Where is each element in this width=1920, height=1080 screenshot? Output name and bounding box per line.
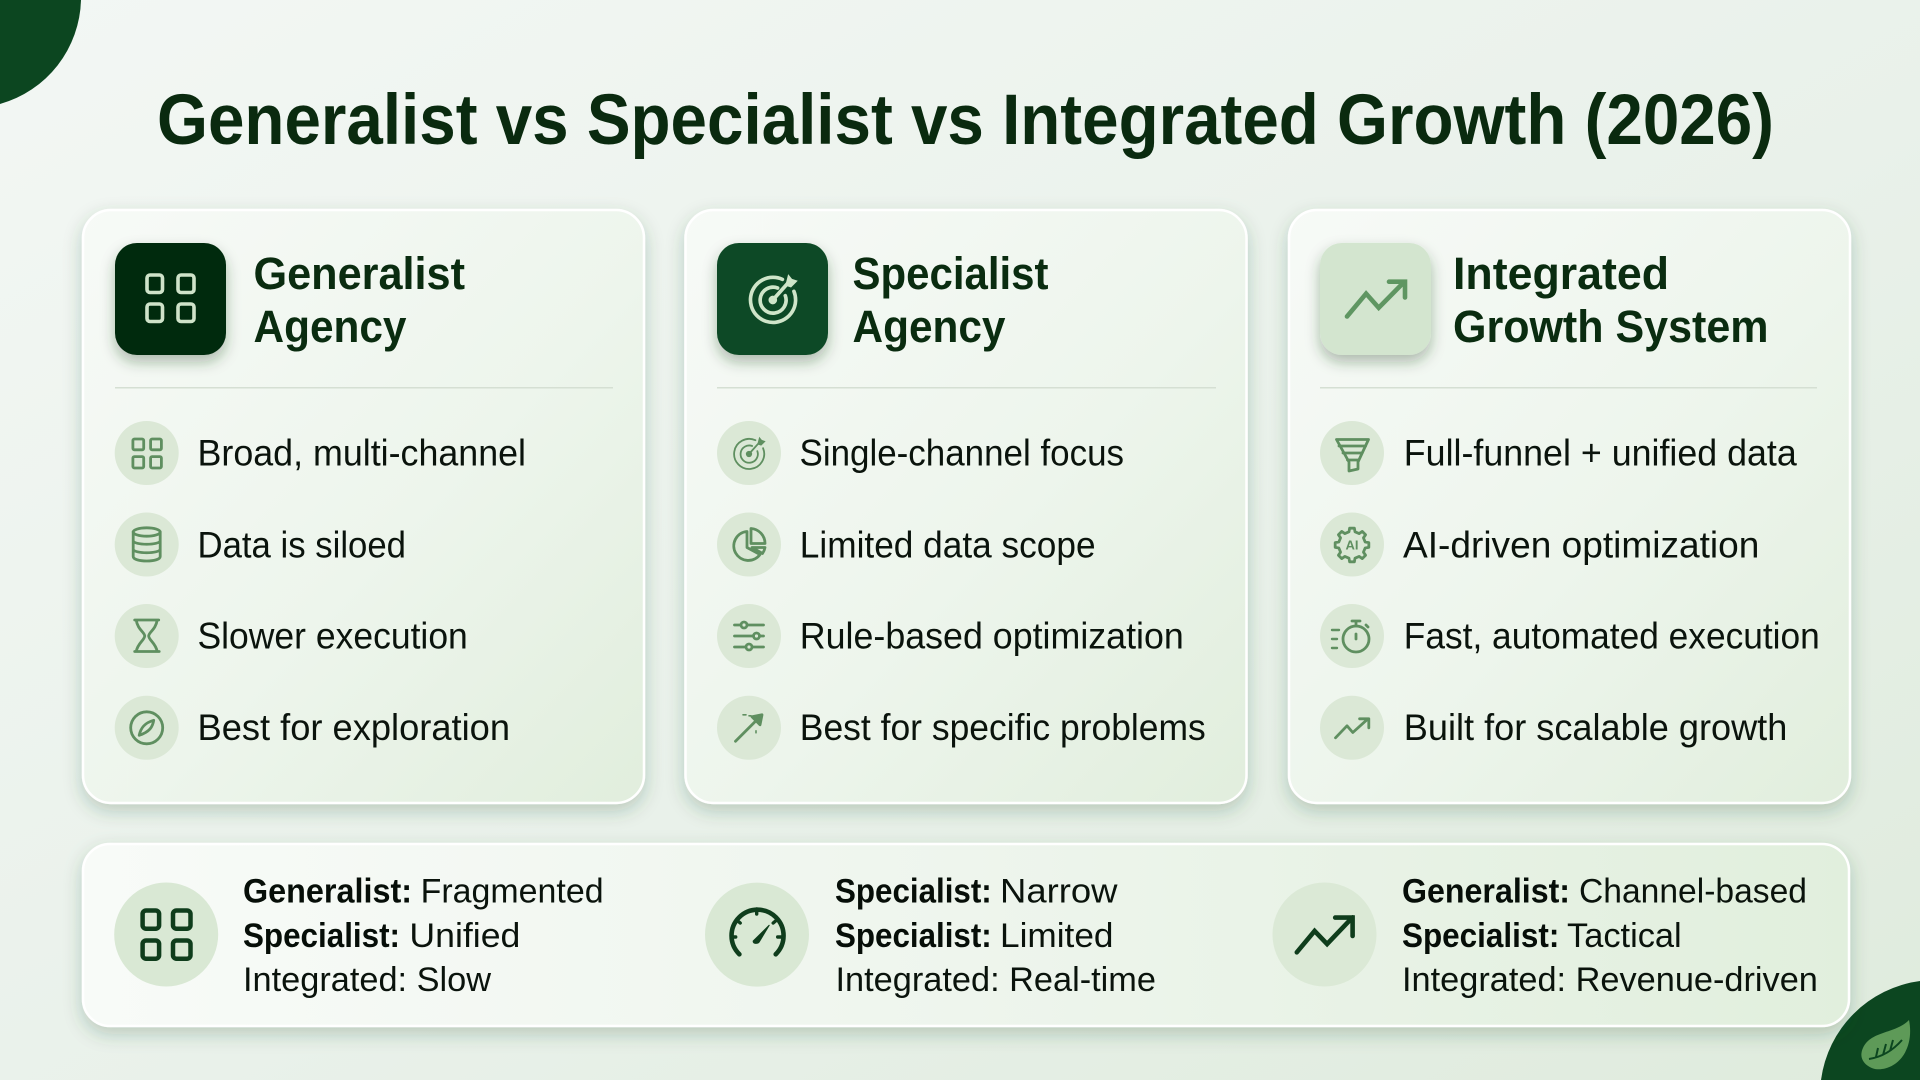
row: ai-driven optimization: AI-driven optimization bbox=[1403, 524, 1759, 566]
group: data comparison bbox=[114, 873, 604, 999]
heading: specialist agency: Agency bbox=[852, 301, 1006, 352]
row: rule-based optimization bbox=[717, 604, 1184, 668]
heading: integrated growth system: Integrated bbox=[1453, 248, 1669, 299]
title: Generalist vs Specialist vs Integrated Growth (2026) bbox=[157, 81, 1774, 160]
heading: integrated growth system bbox=[1453, 248, 1768, 352]
group: speed comparison bbox=[705, 873, 1156, 999]
icon: trend bbox=[1272, 882, 1376, 986]
row: limited data scope: Limited data scope bbox=[800, 524, 1096, 566]
row: ai-driven optimization: AI bbox=[1346, 538, 1358, 552]
row: limited data scope bbox=[717, 512, 1096, 576]
text: speed comparison lines bbox=[835, 873, 1156, 999]
row: fast automated execution: Fast, automated execution bbox=[1404, 616, 1820, 657]
icon: specialist header target bbox=[717, 243, 828, 355]
group: strategy comparison bbox=[1272, 873, 1818, 999]
text: data comparison lines: Integrated: Slow bbox=[243, 961, 491, 999]
text: strategy comparison lines: Tactical bbox=[1567, 917, 1682, 955]
text: data comparison lines: Specialist: bbox=[243, 917, 400, 955]
row: broad multi-channel bbox=[115, 421, 526, 485]
text: data comparison lines: Unified bbox=[409, 917, 520, 955]
text: strategy comparison lines bbox=[1402, 873, 1818, 999]
row: ai-driven optimization bbox=[1320, 512, 1759, 576]
heading: specialist agency bbox=[852, 248, 1049, 352]
text: data comparison lines: Fragmented bbox=[421, 873, 604, 911]
heading: specialist agency: Specialist bbox=[852, 248, 1049, 299]
row: best for exploration: Best for exploration bbox=[198, 707, 510, 748]
icon: grid bbox=[114, 882, 218, 986]
row: fast automated execution bbox=[1320, 604, 1820, 668]
panel: generalist agency bbox=[83, 210, 644, 803]
text: strategy comparison lines: Integrated: Revenue-driven bbox=[1402, 961, 1818, 999]
text: data comparison lines bbox=[243, 873, 604, 999]
text: speed comparison lines: Specialist: bbox=[835, 873, 992, 911]
panel: integrated growth system bbox=[1289, 210, 1850, 803]
row: best for specific problems bbox=[717, 696, 1206, 760]
row: slower execution bbox=[115, 604, 468, 668]
panel: specialist agency bbox=[686, 210, 1246, 803]
icon: integrated header trend bbox=[1320, 243, 1431, 355]
text: strategy comparison lines: Generalist: bbox=[1402, 873, 1570, 911]
row: data is siloed: Data is siloed bbox=[198, 524, 406, 566]
text: speed comparison lines: Integrated: Real-time bbox=[836, 961, 1156, 999]
text: speed comparison lines: Limited bbox=[1000, 917, 1114, 955]
row: best for specific problems: Best for specific problems bbox=[800, 707, 1206, 748]
row: full-funnel unified data: Full-funnel + unified data bbox=[1404, 433, 1797, 474]
icon: gauge bbox=[705, 883, 809, 987]
text: strategy comparison lines: Channel-based bbox=[1579, 873, 1807, 911]
heading: generalist agency: Generalist bbox=[254, 248, 465, 299]
text: data comparison lines: Generalist: bbox=[243, 873, 412, 911]
icon: generalist header grid bbox=[115, 243, 226, 355]
row: built for scalable growth: Built for scalable growth bbox=[1404, 707, 1787, 748]
heading: integrated growth system: Growth System bbox=[1453, 301, 1768, 352]
decorative corner: top left bbox=[0, 0, 81, 104]
row: best for exploration bbox=[115, 696, 510, 760]
text: speed comparison lines: Narrow bbox=[1000, 873, 1118, 911]
row: broad multi-channel: Broad, multi-channel bbox=[198, 433, 526, 474]
row: slower execution: Slower execution bbox=[198, 616, 468, 657]
decorative corner: bottom right with leaf bbox=[1821, 981, 1920, 1080]
text: speed comparison lines: Specialist: bbox=[835, 917, 992, 955]
row: single-channel focus bbox=[717, 421, 1124, 485]
heading: generalist agency bbox=[254, 248, 465, 352]
row: rule-based optimization: Rule-based optimization bbox=[800, 616, 1184, 657]
row: built for scalable growth bbox=[1320, 696, 1787, 760]
heading: generalist agency: Agency bbox=[254, 301, 406, 352]
row: single-channel focus: Single-channel focus bbox=[800, 433, 1124, 474]
row: data is siloed bbox=[115, 512, 406, 576]
text: strategy comparison lines: Specialist: bbox=[1402, 917, 1559, 955]
panel: bottom comparison strip bbox=[83, 844, 1849, 1026]
row: full-funnel unified data bbox=[1320, 421, 1797, 485]
